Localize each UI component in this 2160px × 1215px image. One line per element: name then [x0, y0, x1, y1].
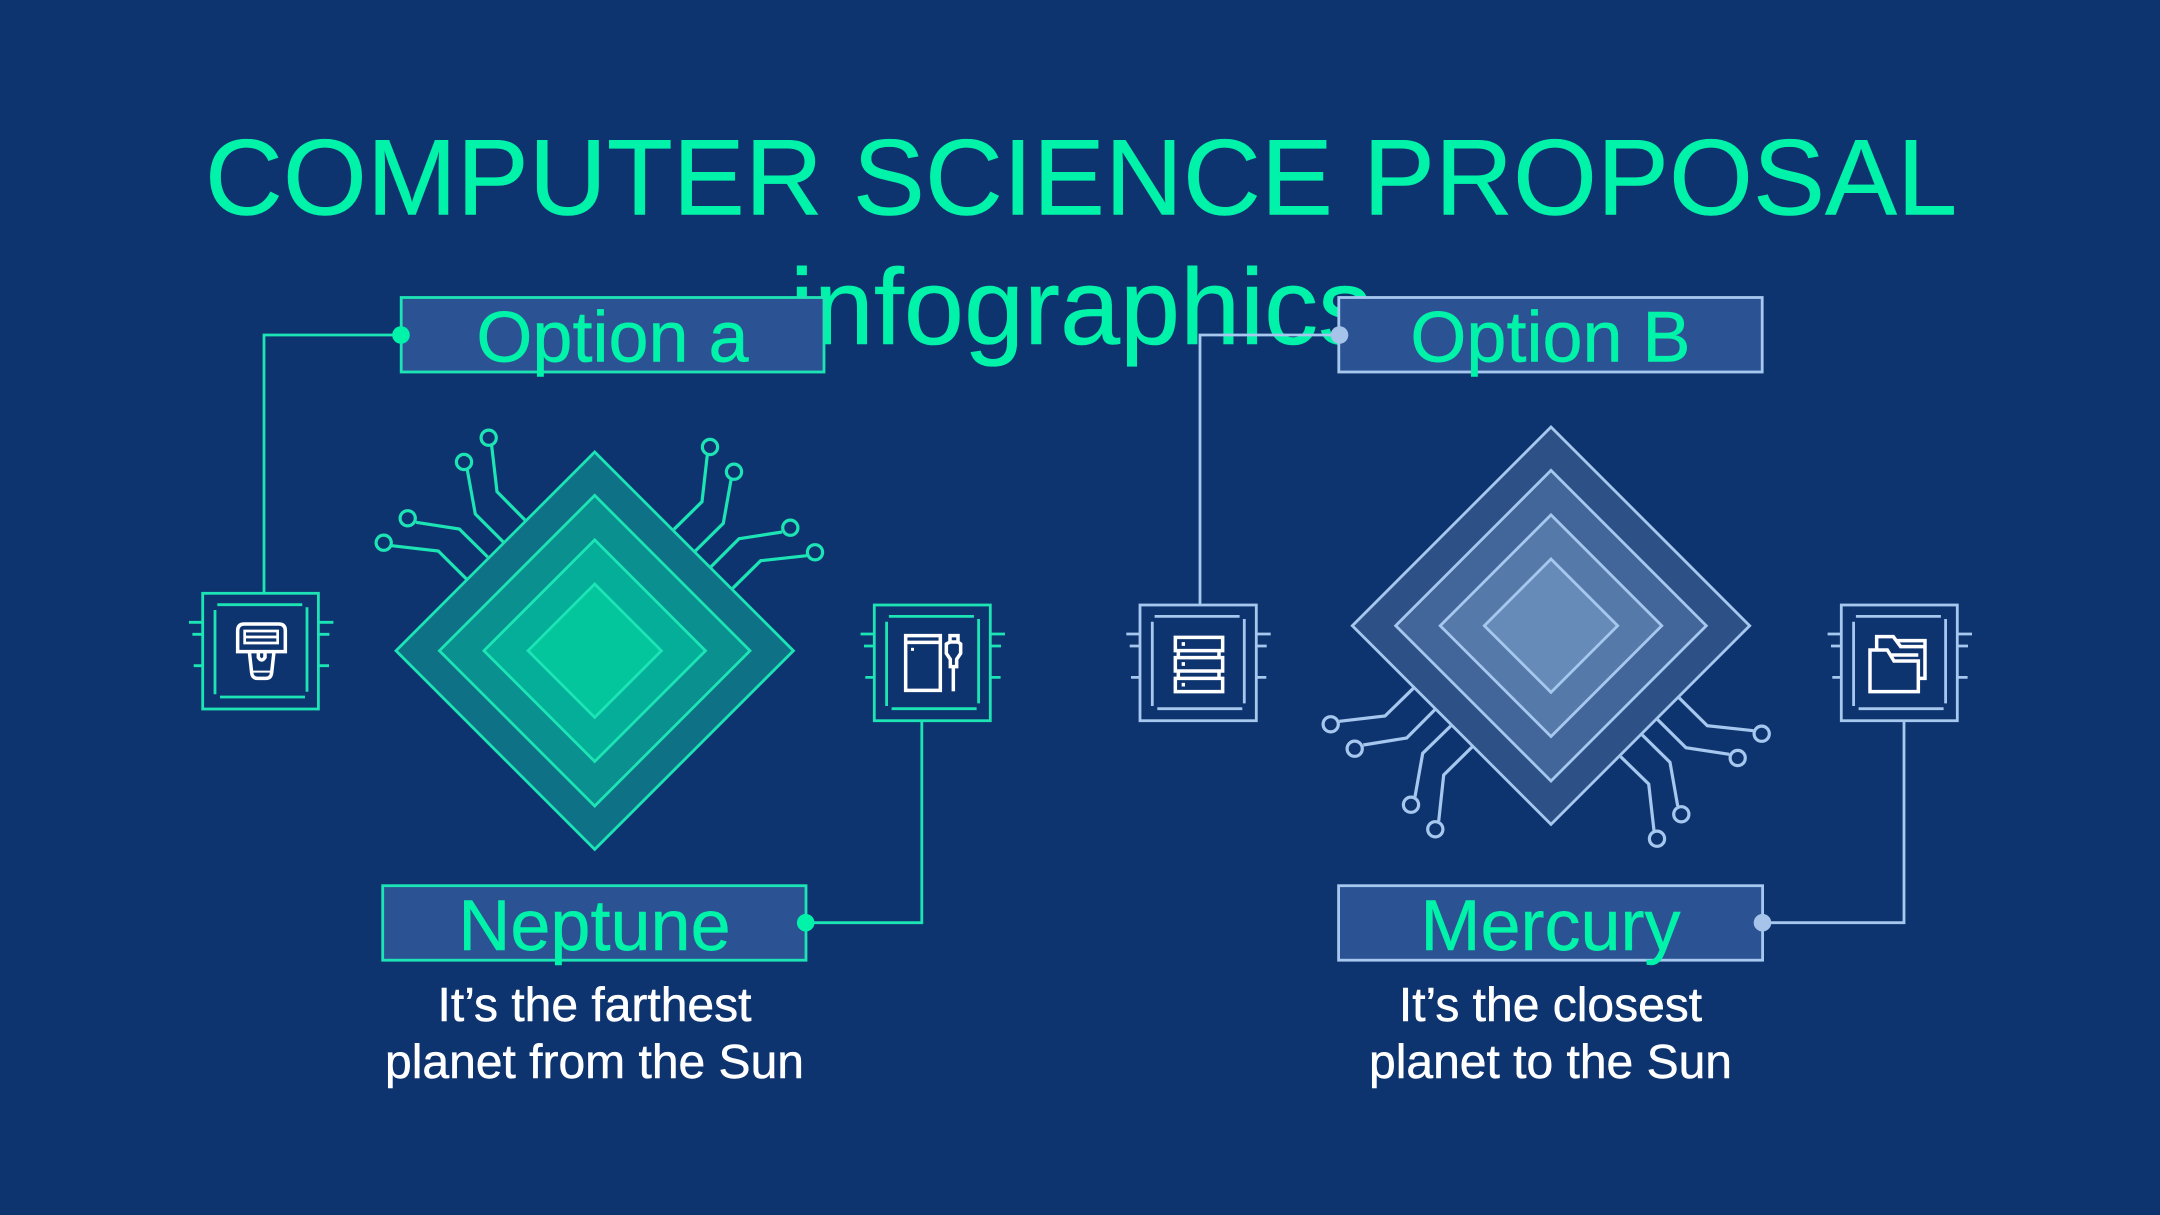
icon: folders — [1870, 637, 1925, 692]
label: neptune — [383, 886, 814, 966]
nested diamonds — [396, 452, 793, 849]
title — [205, 116, 1957, 367]
panel: option a — [264, 298, 824, 593]
panel: option b — [1200, 298, 1762, 605]
connector: mercury to folder chip — [1762, 721, 1904, 923]
panel: neptune — [383, 721, 922, 1089]
description: mercury: It’s the closest — [1399, 979, 1702, 1032]
chip: neptune diamond with leads — [376, 430, 823, 849]
chip: mercury diamond with leads — [1323, 427, 1769, 846]
label: option b — [1331, 298, 1762, 378]
label: option a: Option a — [476, 298, 750, 378]
label: mercury — [1339, 886, 1771, 966]
circuit leads — [1323, 688, 1769, 846]
icon chip: tablet and usb — [861, 605, 1005, 721]
description: neptune: planet from the Sun — [385, 1036, 804, 1089]
chip outline — [189, 593, 333, 709]
panel: mercury — [1339, 721, 1904, 1089]
connector: option a to scanner chip — [264, 335, 401, 593]
title: infographics — [790, 246, 1372, 367]
icon chip: server — [1126, 605, 1271, 721]
label: option a — [392, 298, 824, 378]
title: COMPUTER SCIENCE PROPOSAL — [205, 116, 1957, 238]
circuit leads — [376, 430, 823, 588]
icon chip: scanner — [189, 593, 333, 709]
label: neptune: Neptune — [458, 886, 731, 966]
description: neptune — [385, 979, 804, 1089]
description: neptune: It’s the farthest — [438, 979, 751, 1032]
label: option b: Option B — [1410, 298, 1691, 378]
label: mercury: Mercury — [1420, 886, 1681, 966]
description: mercury — [1369, 979, 1732, 1089]
connector: neptune to usb chip — [806, 721, 922, 923]
icon: tablet and usb plug — [906, 636, 961, 691]
icon: server stack — [1175, 637, 1223, 692]
nested diamonds — [1352, 427, 1750, 824]
connector: option b to server chip — [1200, 335, 1339, 605]
chip outline — [861, 605, 1005, 721]
icon chip: folders — [1828, 605, 1972, 721]
chip outline — [1828, 605, 1972, 721]
description: mercury: planet to the Sun — [1369, 1036, 1732, 1089]
chip outline — [1126, 605, 1271, 721]
icon: barcode scanner — [238, 624, 285, 678]
